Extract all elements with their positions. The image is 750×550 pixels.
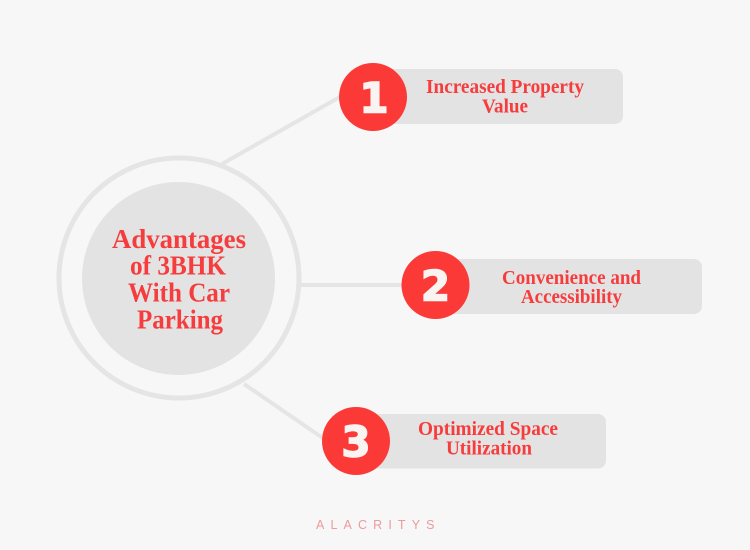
item 3 number badge: [322, 407, 390, 475]
hub title: of 3BHK: [130, 250, 226, 280]
item 3 label: [418, 418, 558, 460]
item 1 label bar: [373, 69, 623, 124]
item 1 label: [426, 76, 585, 118]
central hub: [59, 158, 299, 398]
item 3 number: 3: [341, 418, 371, 466]
connector: hub to item 1: [222, 94, 345, 164]
connector: hub to item 3: [244, 384, 330, 443]
item 1 label: Increased Property: [426, 76, 585, 98]
item 1 number badge: [339, 63, 407, 131]
item 3 label bar: [356, 414, 606, 468]
hub title: Advantages: [112, 224, 246, 254]
item 2 label: Convenience and: [502, 267, 642, 289]
connector: hub to item 2: [299, 283, 410, 287]
item 2 number badge: [402, 251, 470, 319]
item 1: [339, 63, 623, 131]
item 1 label: Value: [482, 96, 528, 118]
item 3: [322, 407, 606, 475]
hub title: Parking: [137, 304, 223, 334]
footer brand: ALACRITYS: [316, 518, 434, 532]
item 2: [402, 251, 702, 319]
item 3 label: Utilization: [446, 438, 533, 460]
item 1 number: 1: [359, 74, 389, 122]
item 2 label: [502, 267, 642, 308]
hub inner disc: [82, 182, 275, 375]
item 2 label bar: [436, 259, 702, 314]
hub title: [112, 224, 246, 334]
hub title: With Car: [128, 278, 230, 308]
item 2 number: 2: [421, 262, 450, 310]
hub outer ring: [59, 158, 299, 398]
item 3 label: Optimized Space: [418, 418, 558, 440]
item 2 label: Accessibility: [521, 286, 623, 308]
